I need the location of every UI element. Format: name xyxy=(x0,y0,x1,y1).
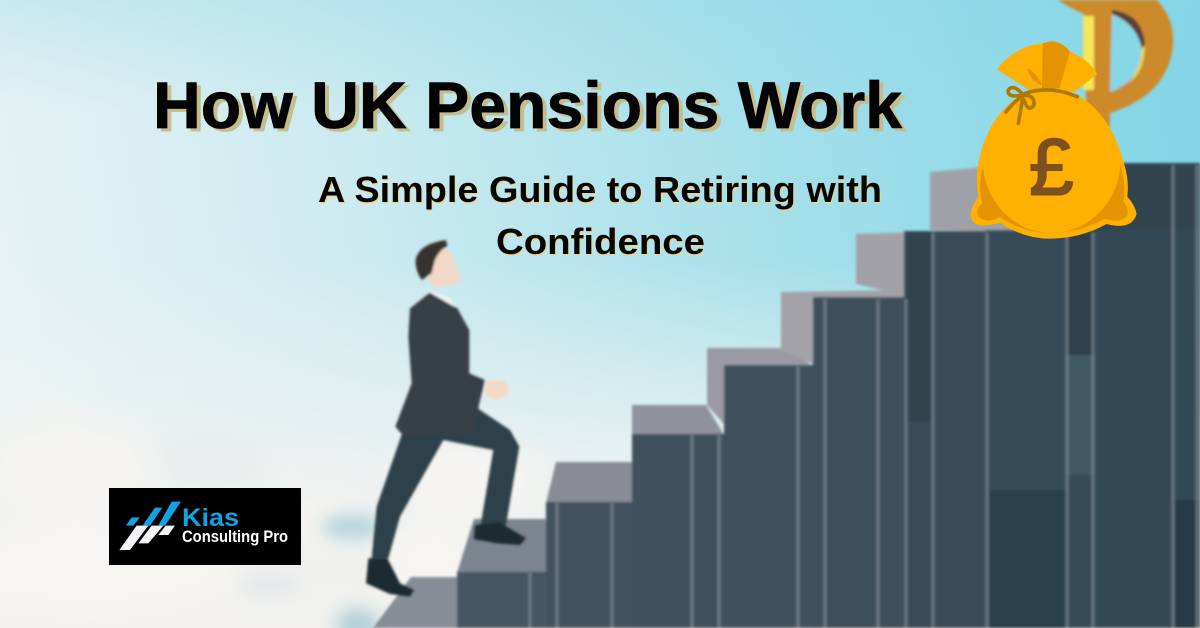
businessman climbing xyxy=(366,240,526,597)
subtitle: A Simple Guide to Retiring with xyxy=(318,169,882,210)
title: How UK Pensions Work xyxy=(157,71,906,145)
dollar sign sculpture xyxy=(1058,0,1173,127)
icon: money bag with pound sign xyxy=(971,42,1137,239)
jacket xyxy=(395,293,485,436)
logo: Kias Consulting Pro xyxy=(109,488,301,565)
subtitle: Confidence xyxy=(496,221,705,262)
trousers xyxy=(372,407,519,558)
rope xyxy=(1006,88,1077,123)
staircase xyxy=(373,163,1200,628)
pound sign: £ xyxy=(1029,122,1074,211)
step 1 xyxy=(457,519,548,628)
bag neck xyxy=(997,42,1097,92)
step 3 xyxy=(632,405,724,628)
background: clouds xyxy=(0,420,540,628)
step 4 xyxy=(707,348,814,628)
subtitle: Confidence xyxy=(497,222,706,264)
shirt collar xyxy=(428,290,458,313)
logo: Kias Consulting Pro: Consulting Pro xyxy=(182,528,288,546)
subtitle xyxy=(318,169,883,264)
step 6 xyxy=(856,230,989,628)
logo mark xyxy=(119,502,181,550)
bag body xyxy=(971,91,1137,239)
shoes xyxy=(366,523,526,597)
logo wordmark: Kias xyxy=(182,504,239,532)
hand xyxy=(485,380,508,399)
stone joints xyxy=(530,165,1197,628)
bag shadow xyxy=(977,166,1128,233)
subtitle: A Simple Guide to Retiring with xyxy=(319,170,883,212)
step 2 xyxy=(546,462,636,628)
head xyxy=(416,240,461,287)
step 5 xyxy=(781,290,907,628)
step 7 xyxy=(907,163,1200,628)
landing step xyxy=(373,577,465,628)
title: How UK Pensions Work xyxy=(153,68,902,142)
